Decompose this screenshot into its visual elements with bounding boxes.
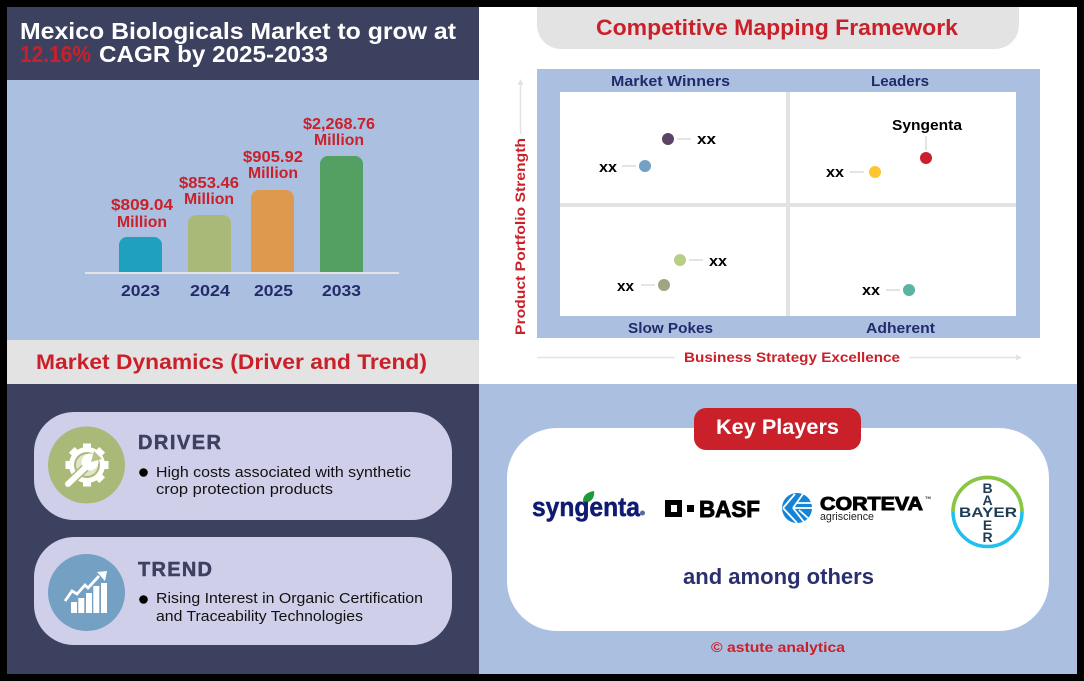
heading: market dynamics: Market Dynamics (Driver and Trend) bbox=[36, 351, 427, 374]
slow poke point upper bbox=[674, 253, 728, 270]
logo: Bayer: A bbox=[982, 492, 993, 508]
panel: key players bbox=[479, 384, 1077, 674]
matrix frame bbox=[537, 69, 1040, 338]
x axis label and arrow: Business Strategy Excellence bbox=[684, 349, 900, 365]
y axis label and arrow: Product Portfolio Strength bbox=[512, 138, 528, 335]
icon: gear and wrench bbox=[48, 426, 125, 504]
logo: Bayer bbox=[953, 478, 1022, 546]
title: 12.16% bbox=[20, 41, 91, 67]
card: trend bbox=[34, 537, 452, 645]
card: driver bbox=[34, 412, 452, 520]
logo: Corteva: agriscience bbox=[820, 511, 874, 523]
market winner point upper: xx bbox=[697, 131, 717, 148]
bar 2033: $2,268.76 bbox=[303, 116, 375, 133]
heading: competitive mapping framework bbox=[537, 7, 1019, 49]
bar 2025 bbox=[243, 149, 303, 300]
leader point: Syngenta bbox=[892, 118, 963, 164]
driver bullet text: High costs associated with synthetic bbox=[156, 464, 412, 481]
bar 2033: Million bbox=[314, 132, 364, 149]
driver bullet text: crop protection products bbox=[156, 481, 333, 498]
x axis label and arrow bbox=[537, 349, 1022, 365]
trend heading: TREND bbox=[138, 559, 212, 581]
bar 2025: 2025 bbox=[254, 283, 293, 300]
driver heading: DRIVER bbox=[138, 432, 222, 454]
logo: Corteva: CORTEVA bbox=[820, 494, 923, 514]
y axis label and arrow bbox=[512, 79, 528, 335]
heading: key players: Key Players bbox=[716, 416, 839, 439]
title: CAGR by 2025-2033 bbox=[99, 41, 328, 67]
matrix frame: Market Winners bbox=[611, 74, 730, 90]
trend bullet text: and Traceability Technologies bbox=[156, 608, 363, 625]
leader point bbox=[826, 164, 881, 181]
heading: market dynamics bbox=[7, 340, 479, 384]
logo: Corteva: TM bbox=[925, 495, 931, 500]
bar 2023: 2023 bbox=[121, 283, 160, 300]
market winner point upper bbox=[662, 131, 717, 148]
trend bullet text: Rising Interest in Organic Certification bbox=[156, 590, 423, 607]
matrix frame: Leaders bbox=[871, 74, 929, 90]
bar 2033 bbox=[303, 116, 375, 300]
title: Mexico Biologicals Market to grow at bbox=[20, 18, 456, 44]
slow poke point lower bbox=[617, 278, 670, 295]
bar 2024: $853.46 bbox=[179, 175, 239, 192]
heading: competitive mapping framework: Competitive Mapping Framework bbox=[596, 15, 959, 40]
logo: Syngenta: syngenta bbox=[532, 492, 641, 522]
logo: Bayer: B bbox=[982, 480, 993, 496]
market winner point lower bbox=[599, 159, 651, 176]
panel: competitive mapping bbox=[479, 7, 1077, 384]
panel: title header bbox=[7, 7, 479, 80]
leader point: xx bbox=[826, 164, 845, 181]
matrix frame: Slow Pokes bbox=[628, 321, 713, 337]
slow poke point lower: xx bbox=[617, 278, 635, 295]
heading: key players bbox=[694, 408, 861, 450]
text: and among others: and among others bbox=[683, 564, 874, 589]
bar 2023: Million bbox=[117, 214, 167, 231]
icon: growth chart bbox=[48, 554, 125, 631]
leader point: Syngenta: Syngenta bbox=[892, 118, 963, 134]
matrix frame: Adherent bbox=[866, 321, 935, 337]
bar 2025: $905.92 bbox=[243, 149, 303, 166]
credit: astute analytica: © astute analytica bbox=[711, 639, 845, 655]
slow poke point upper: xx bbox=[709, 253, 728, 270]
panel: market size bar chart bbox=[7, 80, 479, 340]
adherent point bbox=[862, 282, 915, 299]
bar 2024: 2024 bbox=[190, 283, 230, 300]
bar 2023: $809.04 bbox=[111, 197, 173, 214]
logo: Bayer: R bbox=[982, 529, 993, 545]
logo: BASF bbox=[665, 496, 760, 522]
panel: driver and trend bbox=[7, 384, 479, 674]
logo: Corteva bbox=[782, 493, 931, 523]
bar 2025: Million bbox=[248, 165, 298, 182]
logo: Bayer: E bbox=[983, 517, 992, 533]
title bbox=[20, 18, 456, 67]
bar 2023 bbox=[111, 197, 173, 300]
bar 2024: Million bbox=[184, 191, 234, 208]
bar 2033: 2033 bbox=[322, 283, 361, 300]
logo: Bayer: BAYER bbox=[959, 504, 1017, 520]
driver bullet text bbox=[139, 464, 412, 498]
market winner point lower: xx bbox=[599, 159, 618, 176]
logo: BASF: BASF bbox=[699, 496, 760, 522]
bar 2024 bbox=[179, 175, 239, 300]
trend bullet text bbox=[139, 590, 423, 625]
adherent point: xx bbox=[862, 282, 881, 299]
